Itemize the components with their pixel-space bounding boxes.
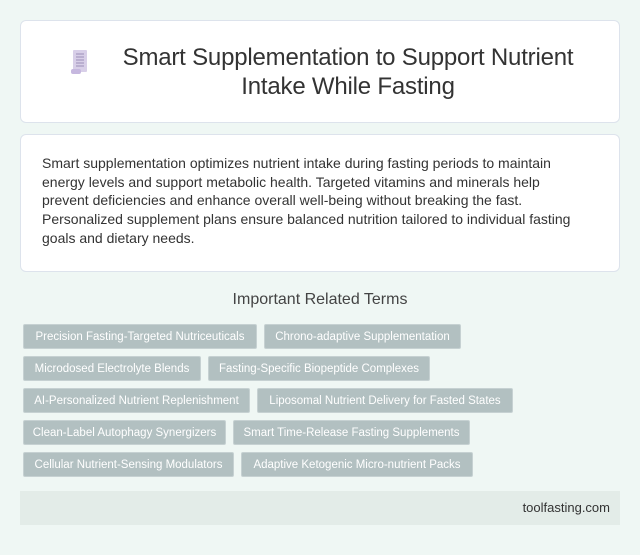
title: Smart Supplementation to Support Nutrient (123, 44, 573, 71)
title: Intake While Fasting (241, 73, 455, 100)
tag: Fasting-Specific Biopeptide Complexes (219, 363, 419, 375)
tag (23, 420, 226, 445)
tag: AI-Personalized Nutrient Replenishment (34, 395, 239, 407)
tag (23, 324, 257, 349)
tag (233, 420, 470, 445)
tag: Precision Fasting-Targeted Nutriceuticals (35, 331, 244, 343)
tag (23, 356, 201, 381)
tag (23, 452, 234, 477)
tag (241, 452, 473, 477)
tag (23, 388, 250, 413)
description text: Smart supplementation optimizes nutrient intake during fasting periods to maintain energy levels and support metabolic health. Targeted vitamins and minerals help prevent deficiencies and enhance overall well-being without breaking the fast. Personalized supplement plans ensure balanced nutrition tailored to individual fasting goals and dietary needs. (42, 155, 570, 246)
tag: Cellular Nutrient-Sensing Modulators (35, 459, 222, 471)
tag: Liposomal Nutrient Delivery for Fasted States (269, 395, 501, 407)
title card (20, 20, 620, 123)
tag (264, 324, 461, 349)
tag (208, 356, 430, 381)
footer (20, 491, 620, 525)
heading: related terms: Important Related Terms (233, 291, 407, 308)
tag: Adaptive Ketogenic Micro-nutrient Packs (253, 459, 461, 471)
tag: Microdosed Electrolyte Blends (35, 363, 189, 375)
tag (257, 388, 513, 413)
title (123, 44, 574, 100)
footer text: toolfasting.com (523, 500, 610, 515)
tag: Clean-Label Autophagy Synergizers (33, 427, 216, 439)
description card (20, 134, 620, 272)
tag: Smart Time-Release Fasting Supplements (243, 427, 460, 439)
icon: document (71, 50, 87, 74)
tag: Chrono-adaptive Supplementation (275, 331, 450, 343)
